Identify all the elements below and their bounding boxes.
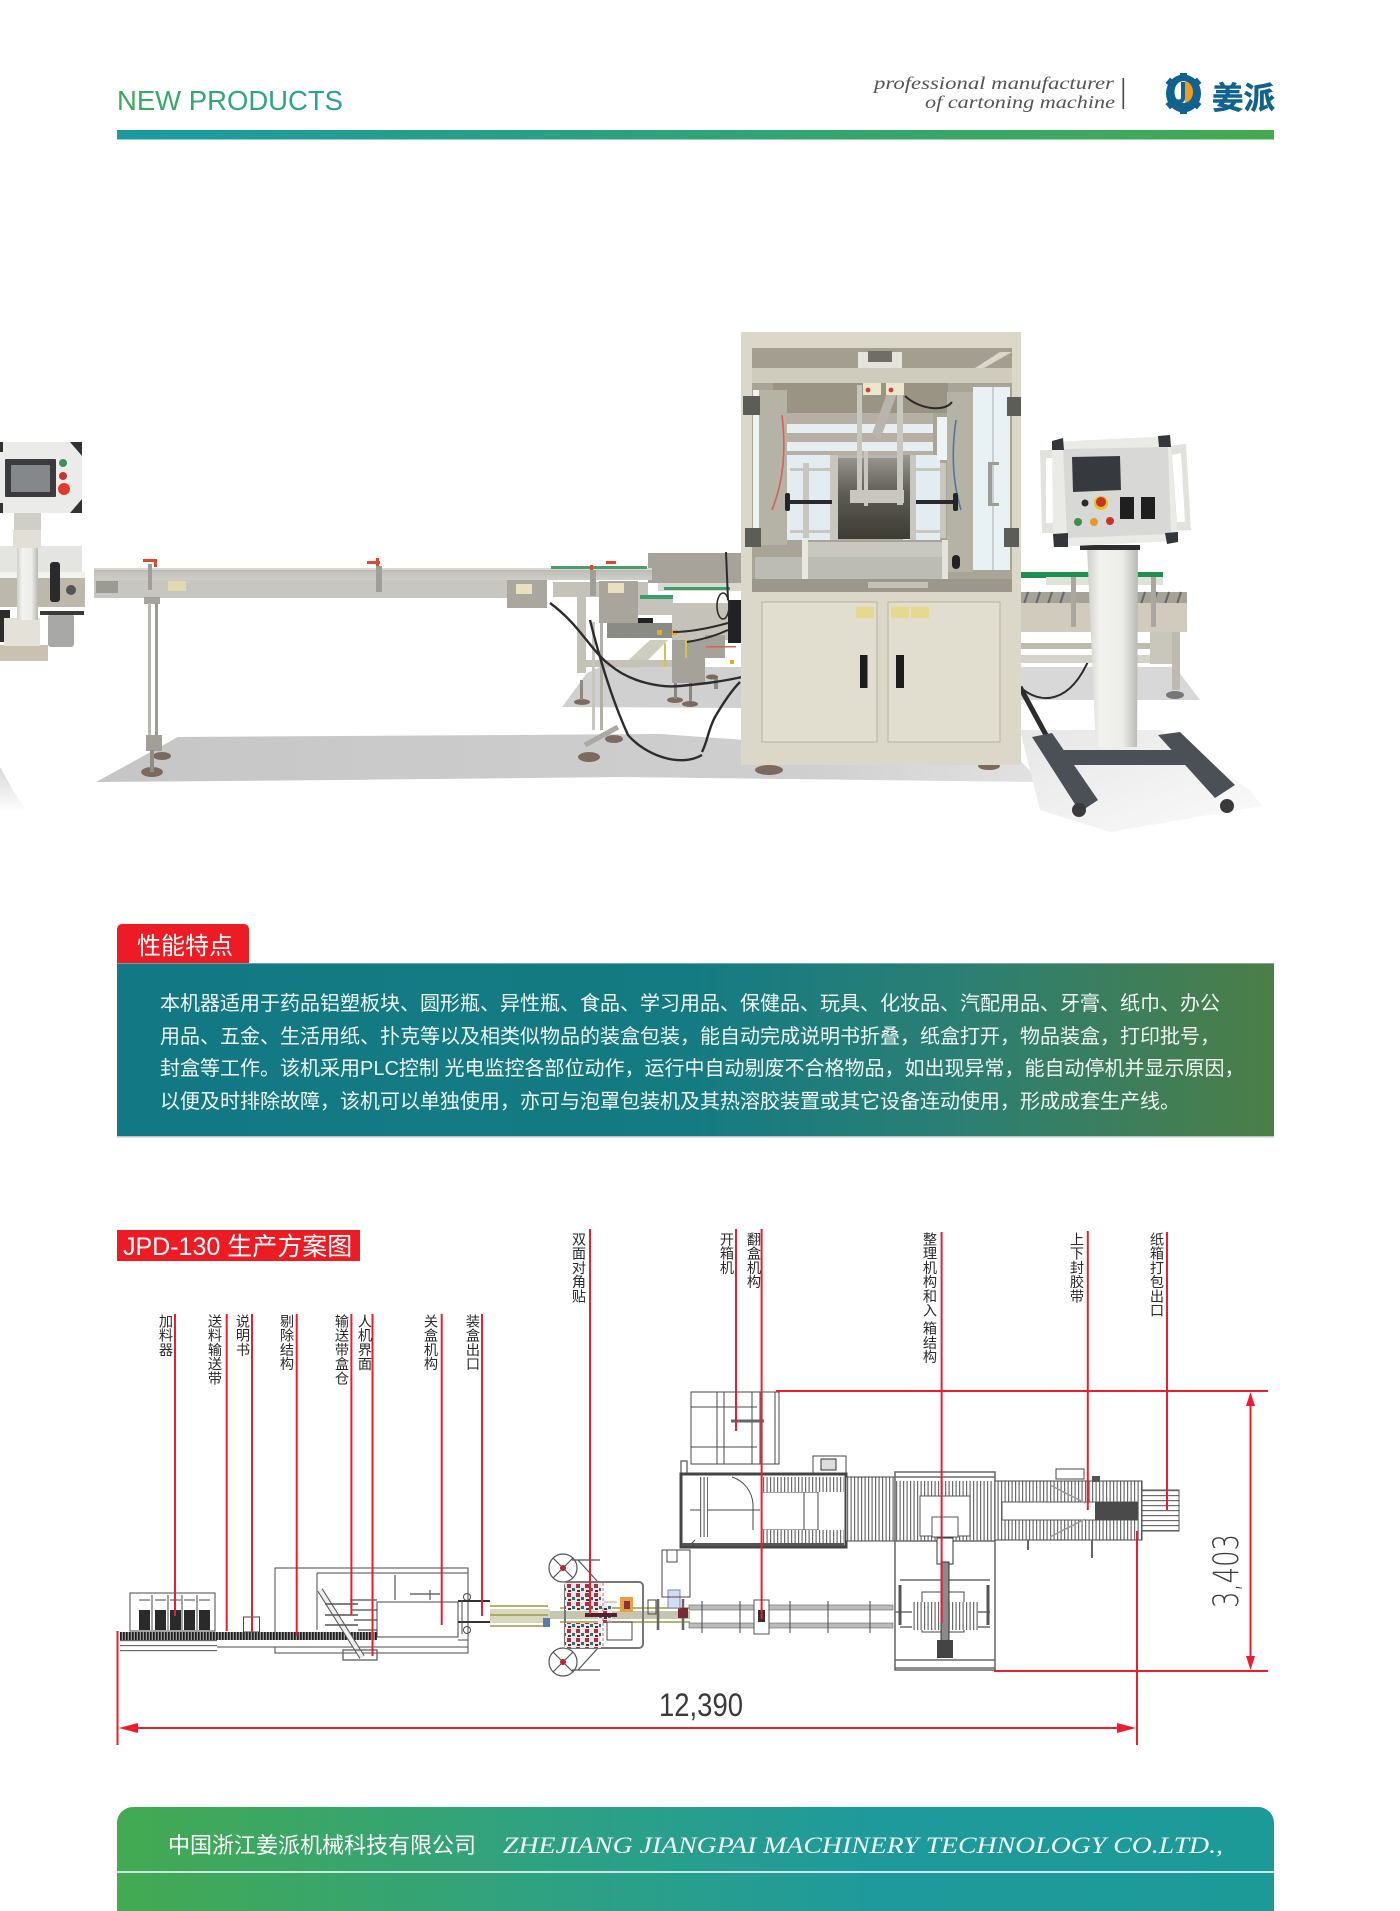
panel face xyxy=(1052,436,1178,547)
callouts: 双面对角贴 xyxy=(570,1232,586,1303)
hinges xyxy=(743,396,1021,547)
hoses xyxy=(772,415,784,510)
operator panel stand xyxy=(1032,435,1235,817)
main cartoning cabinet xyxy=(741,332,1021,775)
dimensions xyxy=(118,1391,1268,1745)
panel handles xyxy=(1040,450,1057,533)
floor shadows xyxy=(0,667,1262,832)
features text: 以便及时排除故障，该机可以单独使用，亦可与泡罩包装机及其热溶胶装置或其它设备连动使用，形成成套生产线。 xyxy=(160,1090,1180,1113)
gradient header bar xyxy=(117,130,1274,140)
features text xyxy=(160,992,1244,1113)
callouts: 人机界面 xyxy=(356,1314,372,1371)
corner sticker unit xyxy=(490,1550,690,1676)
guides xyxy=(790,385,946,540)
left control panel xyxy=(0,442,82,513)
callouts: 关盒机构 xyxy=(422,1314,438,1372)
dimension length xyxy=(118,1531,1137,1745)
trough xyxy=(755,557,945,580)
dimension length: 12,390 xyxy=(659,1687,743,1723)
layout drawing xyxy=(120,1392,1179,1676)
machine window xyxy=(752,348,1012,592)
cables xyxy=(550,552,1090,760)
long conveyor xyxy=(94,558,652,777)
callouts: 送料输送带 xyxy=(206,1314,222,1386)
buttons xyxy=(1074,496,1155,526)
icon: company logo: 姜派 xyxy=(1212,81,1275,116)
top bar xyxy=(752,368,1012,383)
slogan: of cartoning machine xyxy=(925,92,1115,112)
feeder and cartoner xyxy=(120,1568,490,1660)
product photo: cartoning line xyxy=(0,332,1262,832)
arranging unit xyxy=(846,1472,995,1670)
cabinet doors xyxy=(752,592,1012,753)
slogan: professional manufacturer xyxy=(871,73,1115,93)
side columns xyxy=(753,390,759,540)
left control station xyxy=(0,442,85,661)
right conveyor xyxy=(1020,572,1187,699)
tape sealer xyxy=(995,1469,1179,1558)
features text: 用品、五金、生活用纸、扑克等以及相类似物品的装盒包装，能自动完成说明书折叠，纸盒打开，物品装盒，打印批号， xyxy=(160,1025,1220,1048)
stand base xyxy=(1032,732,1235,817)
conveyor legs xyxy=(141,597,623,777)
callouts: 上下封胶带 xyxy=(1068,1232,1084,1304)
side boxes xyxy=(507,580,547,608)
heading: new products: NEW PRODUCTS xyxy=(117,85,343,116)
slogan xyxy=(871,73,1115,112)
header xyxy=(117,73,1275,140)
warning labels top xyxy=(863,383,904,395)
callouts: 整理机构和入 箱结构 xyxy=(921,1232,937,1365)
callouts: 装盒出口 xyxy=(464,1314,480,1371)
box opener xyxy=(681,1392,846,1547)
icon: company logo xyxy=(1166,73,1275,116)
company name xyxy=(168,1833,1223,1858)
dimension height xyxy=(776,1391,1268,1671)
features text: 本机器适用于药品铝塑板块、圆形瓶、异性瓶、食品、学习用品、保健品、玩具、化妆品、汽配用品、牙膏、纸巾、办公 xyxy=(160,992,1220,1015)
callouts: 纸箱打包出口 xyxy=(1148,1232,1164,1317)
callouts: 输送带盒仓 xyxy=(333,1314,349,1385)
callouts xyxy=(157,1229,1167,1656)
diagram title: JPD-130 生产方案图 xyxy=(123,1233,352,1261)
dimension height: 3,403 xyxy=(1207,1534,1247,1608)
feet xyxy=(574,674,718,707)
flip conveyor xyxy=(689,1600,893,1634)
features text: 封盒等工作。该机采用PLC控制 光电监控各部位动作，运行中自动剔废不合格物品，如出现异常，能自动停机并显示原因， xyxy=(160,1057,1244,1080)
company name: 中国浙江姜派机械科技有限公司 xyxy=(168,1833,476,1858)
callouts: 说明书 xyxy=(234,1314,250,1357)
footer xyxy=(117,1807,1274,1911)
cabinet frame xyxy=(741,332,1021,765)
features panel xyxy=(117,963,1274,1138)
callouts: 加料器 xyxy=(157,1314,173,1357)
features tab xyxy=(117,924,249,963)
folding unit xyxy=(553,553,743,707)
features tab: 性能特点 xyxy=(137,933,233,960)
callouts: 开箱机 xyxy=(718,1232,734,1276)
callouts: 剔除结构 xyxy=(278,1314,294,1372)
company name: ZHEJIANG JIANGPAI MACHINERY TECHNOLOGY CO.LTD., xyxy=(503,1833,1223,1858)
callouts: 翻盒机构 xyxy=(745,1232,761,1290)
touch screen xyxy=(1072,456,1121,492)
pillar xyxy=(1087,547,1138,747)
